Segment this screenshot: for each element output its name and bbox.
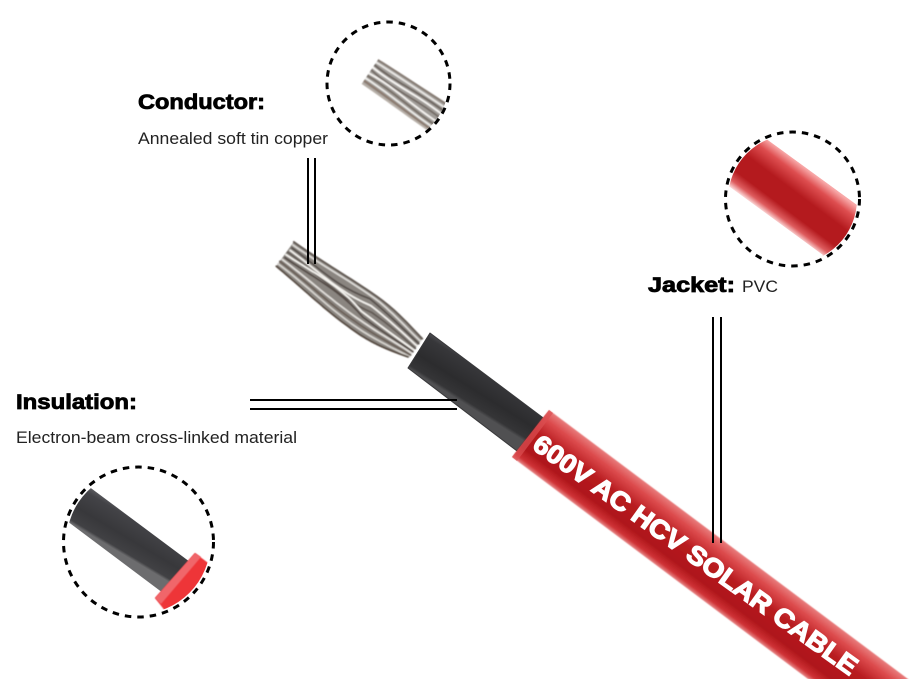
callout: conductor bbox=[138, 91, 329, 264]
insulation leader lines bbox=[250, 400, 457, 409]
jacket section bbox=[512, 410, 920, 679]
callout: jacket bbox=[648, 274, 778, 543]
insulation heading: Insulation: bbox=[16, 391, 137, 414]
dashed circle bbox=[726, 132, 860, 266]
jacket heading: Jacket: bbox=[648, 274, 735, 297]
conductor leader lines bbox=[308, 158, 315, 264]
conductor heading: Conductor: bbox=[138, 91, 265, 114]
inset: jacket detail bbox=[724, 130, 861, 268]
conductor strands bbox=[272, 239, 427, 367]
jacket leader lines bbox=[713, 317, 721, 543]
callout: insulation bbox=[16, 391, 457, 447]
printed cable marking: 600V AC HCV SOLAR CABLE bbox=[528, 428, 864, 679]
insulation description: Electron-beam cross-linked material bbox=[16, 429, 297, 447]
cable photo bbox=[272, 239, 920, 679]
inset: conductor detail bbox=[327, 22, 455, 145]
conductor description: Annealed soft tin copper bbox=[138, 130, 329, 148]
jacket description: PVC bbox=[742, 278, 778, 296]
dashed circle bbox=[327, 22, 450, 145]
inset: insulation detail bbox=[62, 466, 215, 618]
dashed circle bbox=[64, 467, 214, 617]
insulation section bbox=[408, 333, 546, 454]
